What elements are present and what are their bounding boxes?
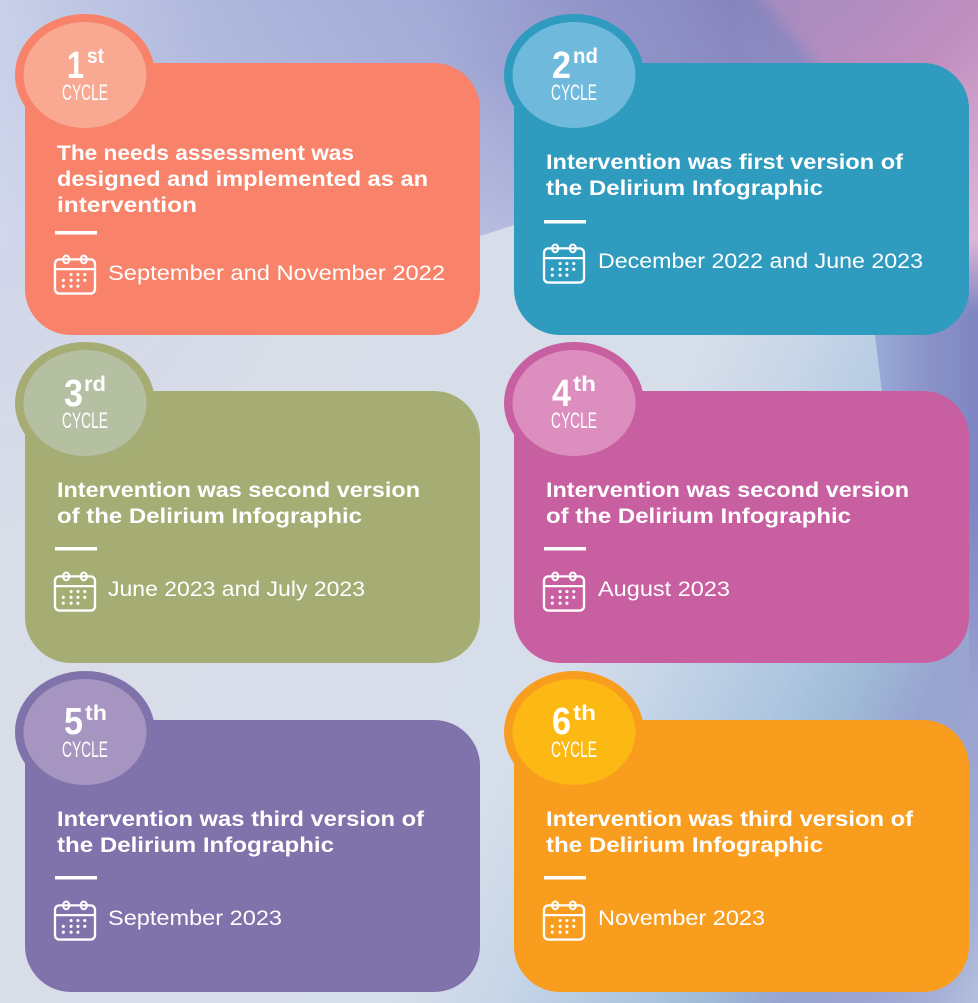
date: 1st cycle: September and November 2022 — [108, 261, 445, 285]
badge: 2nd cycle: CYCLE — [551, 80, 597, 105]
text: 6th cycle description — [546, 808, 914, 857]
badge: 4th cycle: CYCLE — [551, 408, 597, 433]
icon: calendar — [55, 255, 95, 294]
panel: 1st cycle — [15, 14, 480, 335]
badge: 4th cycle — [512, 350, 636, 456]
date: 3rd cycle: June 2023 and July 2023 — [108, 577, 365, 601]
text: 3rd cycle description — [57, 479, 420, 528]
text: 5th cycle description — [57, 808, 425, 857]
badge: 2nd cycle — [512, 22, 636, 128]
icon: calendar — [544, 901, 584, 940]
icon: calendar — [55, 572, 95, 611]
text: 1st cycle description: The needs assessment was — [57, 142, 354, 165]
badge: 3rd cycle — [24, 350, 146, 456]
badge: 5th cycle: th — [85, 702, 107, 725]
text: 6th cycle description: the Delirium Infographic — [546, 834, 823, 857]
panel: 4th cycle — [504, 342, 969, 663]
text: 1st cycle description — [57, 142, 428, 217]
badge: 1st cycle: st — [87, 45, 104, 68]
text: 3rd cycle description: Intervention was second version — [57, 479, 420, 502]
badge: 2nd cycle: 2 — [552, 45, 571, 87]
badge: 4th cycle: 4 — [552, 373, 571, 415]
badge: 6th cycle — [512, 679, 636, 785]
text: 1st cycle description: designed and implemented as an — [57, 168, 428, 191]
text: 5th cycle description: Intervention was third version of — [57, 808, 425, 831]
badge: 3rd cycle: rd — [84, 373, 106, 396]
badge: 1st cycle: 1 — [67, 45, 84, 87]
icon: calendar — [55, 901, 95, 940]
badge: 3rd cycle: 3 — [64, 373, 83, 415]
badge: 1st cycle: CYCLE — [62, 80, 108, 105]
text: 6th cycle description: Intervention was third version of — [546, 808, 914, 831]
badge: 6th cycle: CYCLE — [551, 737, 597, 762]
text: 2nd cycle description: the Delirium Infographic — [546, 177, 823, 200]
badge: 6th cycle: 6 — [552, 701, 571, 743]
icon: calendar — [544, 572, 584, 611]
badge: 1st cycle — [24, 22, 146, 128]
badge: 4th cycle: th — [573, 373, 596, 396]
panel: 2nd cycle — [504, 14, 969, 335]
text: 4th cycle description — [546, 479, 909, 528]
badge: 5th cycle — [24, 679, 146, 785]
text: 2nd cycle description — [546, 151, 904, 200]
text: 4th cycle description: Intervention was second version — [546, 479, 909, 502]
text: 4th cycle description: of the Delirium Infographic — [546, 505, 851, 528]
badge: 5th cycle: CYCLE — [62, 737, 108, 762]
date: 6th cycle: November 2023 — [598, 906, 765, 930]
date: 4th cycle: August 2023 — [598, 577, 730, 601]
panel: 5th cycle — [15, 671, 480, 992]
badge: 5th cycle: 5 — [64, 701, 83, 743]
text: 5th cycle description: the Delirium Infographic — [57, 834, 334, 857]
badge: 2nd cycle: nd — [573, 45, 598, 68]
text: 3rd cycle description: of the Delirium Infographic — [57, 505, 362, 528]
text: 1st cycle description: intervention — [57, 194, 197, 217]
badge: 6th cycle: th — [573, 702, 596, 725]
panel: 3rd cycle — [15, 342, 480, 663]
text: 2nd cycle description: Intervention was first version of — [546, 151, 904, 174]
date: 2nd cycle: December 2022 and June 2023 — [598, 249, 923, 273]
icon: calendar — [544, 244, 584, 283]
panel: 6th cycle — [504, 671, 969, 992]
date: 5th cycle: September 2023 — [108, 906, 282, 930]
badge: 3rd cycle: CYCLE — [62, 408, 108, 433]
